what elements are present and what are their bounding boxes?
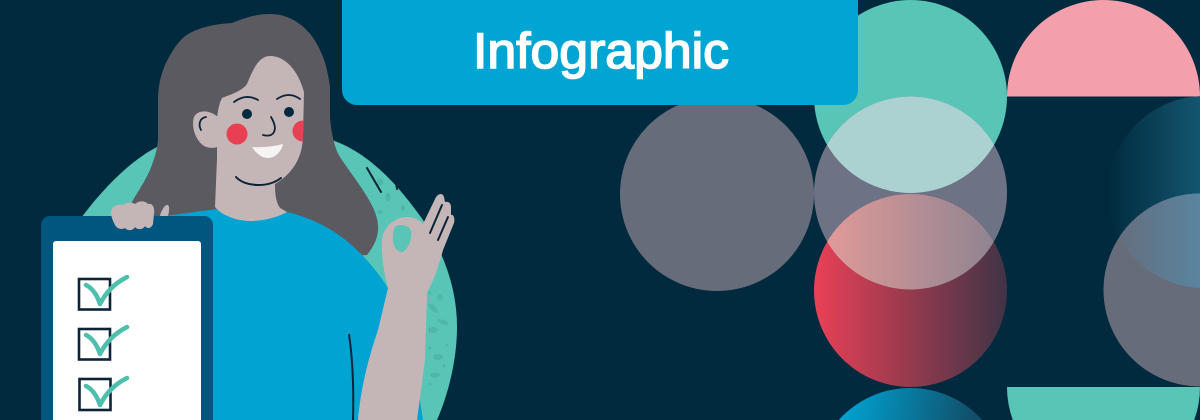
- left gray circle: [620, 97, 814, 291]
- left cheek: [226, 124, 248, 144]
- ring of fingers gap: [393, 225, 411, 252]
- banner box: [342, 0, 858, 105]
- right gray circle: [1104, 194, 1200, 386]
- ear line: [200, 117, 206, 130]
- title banner: [342, 0, 858, 105]
- smile: [252, 144, 283, 158]
- pink half circle: [1007, 0, 1200, 96]
- blue bottom circle: [839, 388, 982, 420]
- jaw line: [236, 177, 281, 185]
- hair: [122, 14, 378, 260]
- decorative circles group: [620, 0, 1200, 420]
- checkbox 3: [80, 378, 127, 410]
- left eyebrow: [234, 97, 258, 102]
- hand holding clipboard: [111, 201, 154, 230]
- clipboard: [41, 201, 213, 420]
- teal blob behind figure: [78, 131, 457, 420]
- paper: [53, 241, 201, 420]
- right eye: [284, 107, 294, 117]
- overlap red and gray: [827, 194, 994, 290]
- right eyebrow: [277, 95, 300, 99]
- thumb: [160, 205, 169, 216]
- teal half circle: [1007, 387, 1200, 420]
- red gradient circle: [814, 194, 1007, 387]
- finger lines: [430, 205, 448, 240]
- left eye: [242, 109, 252, 119]
- overlap teal and gray: [827, 96, 994, 193]
- checkbox 2: [79, 327, 127, 360]
- motion lines: [367, 168, 397, 192]
- center gray circle: [814, 96, 1007, 290]
- right gradient circle: [1108, 96, 1200, 288]
- nose: [263, 117, 275, 136]
- person: [122, 14, 454, 420]
- blob speckles: [377, 178, 449, 386]
- raised arm and ok hand: [358, 194, 454, 420]
- shirt fold line: [349, 334, 353, 420]
- blob shape: [78, 131, 457, 420]
- checkbox 1: [79, 277, 127, 310]
- ear: [193, 111, 219, 148]
- face and neck: [215, 56, 304, 221]
- overlap right circles: [1120, 194, 1200, 288]
- clipboard board: [41, 216, 213, 420]
- right cheek: [292, 120, 304, 142]
- teal circle: [814, 0, 1007, 193]
- title: Infographic: [473, 23, 729, 79]
- shirt: [165, 209, 423, 420]
